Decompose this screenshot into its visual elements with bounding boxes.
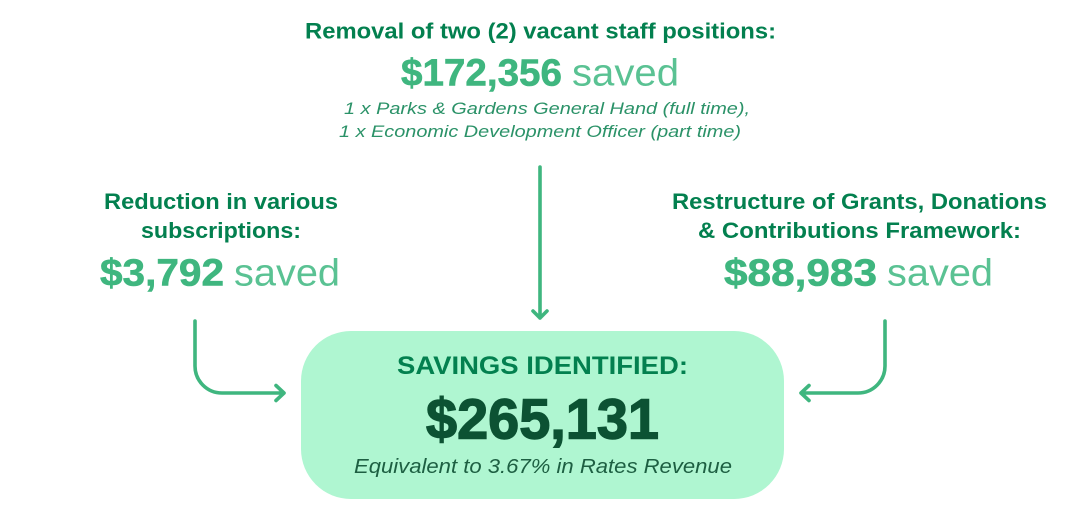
amount: $172,356 saved: $172,356 — [401, 52, 562, 94]
amount: $88,983 saved: saved — [887, 252, 993, 294]
heading: subscriptions: subscriptions: — [141, 218, 301, 243]
amount: $3,792 saved: $3,792 — [100, 252, 224, 294]
amount: $88,983 saved — [724, 252, 993, 294]
arrow: right panel to total — [801, 321, 885, 400]
heading: subscriptions — [104, 189, 338, 243]
text block: position details: 1 x Economic Development Officer (part time) — [339, 122, 741, 141]
panel: savings identified — [301, 331, 784, 499]
arrow: top panel to total — [533, 167, 547, 318]
heading: grants framework — [672, 189, 1047, 243]
text block: position details — [339, 99, 750, 141]
amount: $172,356 saved: saved — [572, 52, 679, 94]
heading: grants framework: Restructure of Grants, Donations — [672, 189, 1047, 214]
heading: vacant staff positions: Removal of two (2) vacant staff positions: — [305, 18, 776, 44]
panel: subscriptions — [100, 189, 340, 294]
heading: subscriptions: Reduction in various — [104, 189, 338, 214]
heading: grants framework: & Contributions Framework: — [698, 218, 1021, 243]
text block: position details: 1 x Parks & Gardens General Hand (full time), — [344, 99, 750, 118]
amount: $3,792 saved — [100, 252, 340, 294]
amount: $3,792 saved: saved — [234, 252, 340, 294]
rates revenue equivalent: Equivalent to 3.67% in Rates Revenue — [354, 456, 732, 478]
total box — [301, 331, 784, 499]
panel: grants framework — [672, 189, 1047, 294]
total amount: $265,131 — [426, 388, 659, 452]
heading: savings identified: SAVINGS IDENTIFIED: — [397, 352, 688, 380]
amount: $88,983 saved: $88,983 — [724, 252, 877, 294]
panel: vacant staff positions — [305, 18, 776, 141]
arrow: left panel to total — [195, 321, 284, 400]
amount: $172,356 saved — [401, 52, 679, 94]
